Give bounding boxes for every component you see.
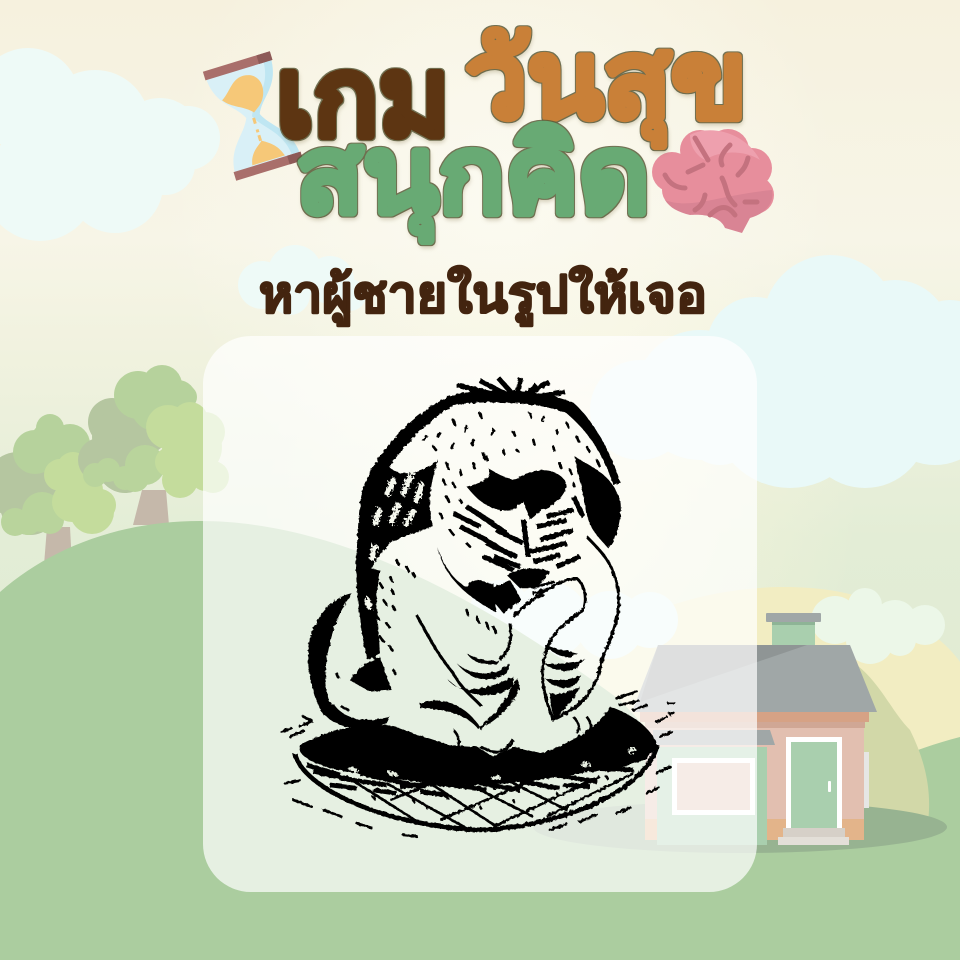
door <box>786 737 842 829</box>
hair tuft <box>447 378 565 400</box>
rug lattice <box>347 770 633 828</box>
house <box>533 613 947 853</box>
cloud: upper left <box>0 48 220 241</box>
toes <box>453 717 591 752</box>
subtitle: หาผู้ชายในรูปให้เจอ <box>259 265 707 327</box>
frosted panel <box>203 336 757 892</box>
brow <box>467 468 567 520</box>
top bar <box>203 51 272 80</box>
brain lobes <box>652 129 774 214</box>
body left band <box>356 567 380 660</box>
rug black shadow <box>299 707 657 785</box>
under-head crescent <box>437 547 497 613</box>
cloud: behind subtitle <box>238 245 366 315</box>
trees <box>0 365 229 565</box>
yellow hill <box>600 587 960 860</box>
ragged light specks in rug shadow <box>350 749 634 778</box>
glass side shade <box>237 56 301 166</box>
hip shadow <box>349 657 392 692</box>
cloud: right <box>590 255 960 488</box>
left ear and side band <box>355 460 438 583</box>
small cloud near house <box>811 588 945 664</box>
steps <box>778 828 849 845</box>
tail <box>308 593 352 717</box>
extension roof <box>653 730 775 745</box>
left paw stripes <box>447 653 513 695</box>
cloud: centre behind panel <box>433 580 678 659</box>
bush behind house <box>840 660 929 822</box>
title word: happy day: วันสุข <box>465 19 747 148</box>
side window strip <box>864 752 869 808</box>
pink wall <box>645 720 864 840</box>
rug rim <box>295 745 657 830</box>
right ear <box>575 457 621 548</box>
hand <box>492 580 522 613</box>
tree: right <box>78 365 229 525</box>
chimney <box>766 613 821 648</box>
left arm contour <box>417 615 511 707</box>
roof <box>632 645 877 712</box>
right paw stripes <box>544 645 585 721</box>
tail base <box>320 703 390 728</box>
nose <box>507 568 550 588</box>
rug dense dark mottling <box>307 757 647 795</box>
wall base <box>645 819 864 840</box>
foot shadow <box>420 678 520 729</box>
fur and fringe speckles <box>282 413 674 836</box>
tree: left <box>0 414 116 565</box>
main green hill and ground <box>0 521 960 960</box>
bottom bar <box>234 152 303 181</box>
title word: fun thinking: สนุกคิด <box>296 114 650 243</box>
fascia <box>640 712 869 728</box>
brain grooves <box>665 138 757 215</box>
brain lower shade <box>665 190 772 233</box>
glass body <box>205 56 301 176</box>
sand <box>217 71 285 168</box>
head outline <box>363 390 621 490</box>
window <box>672 758 755 815</box>
roof shade <box>640 645 807 702</box>
house shadow <box>533 801 947 853</box>
sand stream <box>254 118 261 141</box>
illustration: man hidden in dog picture <box>282 378 674 836</box>
ragged light patches in left ear and band <box>367 473 422 607</box>
extension wall <box>657 747 767 845</box>
cheek arm lines <box>513 537 619 720</box>
face hatching <box>453 497 583 570</box>
brain top highlight <box>690 130 760 160</box>
brain icon <box>652 129 774 233</box>
hourglass icon <box>203 51 303 181</box>
title word: game: เกม <box>276 36 450 159</box>
